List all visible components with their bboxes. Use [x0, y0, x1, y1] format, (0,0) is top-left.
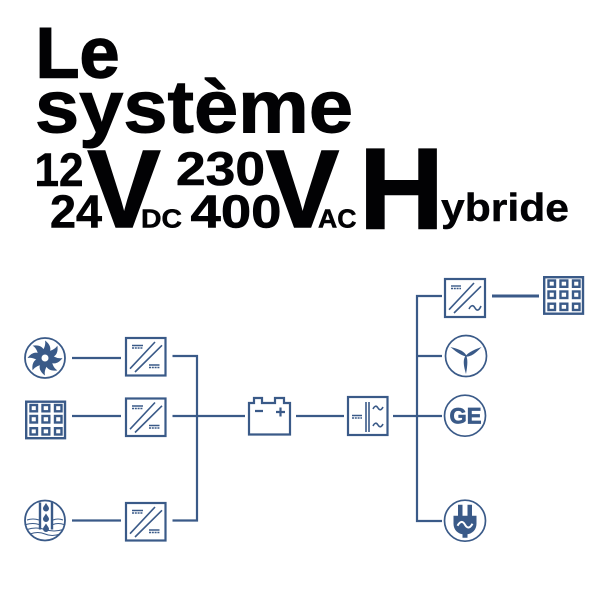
icon: generator GE: GE — [450, 404, 482, 428]
icon: solar panel left — [26, 402, 65, 438]
title line: système: système — [35, 65, 353, 148]
big V DC: V — [88, 128, 160, 251]
voltage 400: 400 — [190, 186, 282, 238]
icon: grid plug — [444, 500, 486, 541]
Hybride: ybride — [441, 187, 569, 230]
icon: wind turbine — [446, 336, 486, 376]
converter DC/DC bottom — [126, 503, 166, 540]
converter DC/AC — [445, 279, 485, 317]
DC label: DC — [141, 204, 182, 234]
voltage 12: 12 — [34, 143, 84, 196]
icon: generator GE — [444, 395, 486, 436]
voltage 24: 24 — [50, 186, 102, 238]
icon: battery — [249, 398, 290, 434]
icon: hydro turbine — [25, 338, 65, 378]
title line: Le: Le — [36, 14, 120, 94]
big H: H — [359, 126, 444, 254]
inverter / charger — [348, 397, 388, 435]
icon: solar panel right — [544, 277, 583, 314]
voltage 230: 230 — [176, 142, 265, 195]
converter DC/DC middle — [126, 398, 166, 436]
converter DC/DC top — [126, 338, 166, 376]
connection lines — [72, 296, 539, 521]
title — [34, 14, 569, 254]
big V AC: V — [266, 128, 339, 251]
icon: water well — [25, 500, 65, 540]
AC label: AC — [318, 204, 357, 234]
